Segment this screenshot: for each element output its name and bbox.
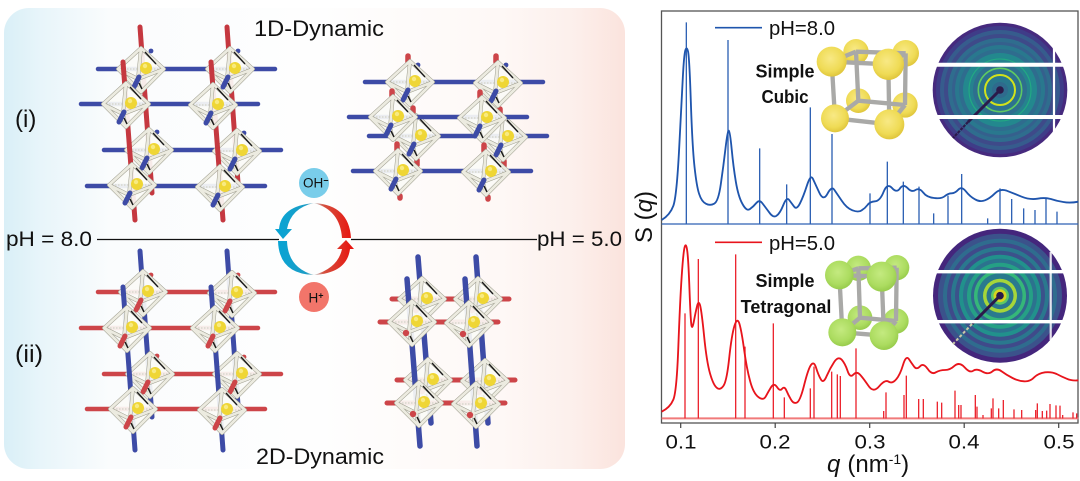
badge: OH-: OH bbox=[303, 176, 323, 190]
icon: reversible cycle arrows bbox=[275, 203, 354, 275]
x-axis title: ) bbox=[901, 451, 909, 478]
label: Simple Cubic bbox=[755, 62, 815, 107]
octahedra: back bbox=[120, 271, 260, 397]
label: Simple Tetragonal bbox=[741, 271, 831, 317]
curves: pH 8.0 bbox=[662, 22, 1078, 224]
x-axis ticks bbox=[681, 423, 1059, 428]
heading: 2D-Dynamic: 2D-Dynamic bbox=[256, 444, 384, 469]
legend: pH 5.0: pH=5.0 bbox=[769, 233, 835, 255]
blue simulated sticks bbox=[662, 22, 1078, 224]
chart frame bbox=[662, 11, 1078, 423]
diffraction pattern: pH 5.0 bbox=[930, 229, 1070, 363]
octahedra: back bbox=[387, 61, 526, 160]
rods: front row bbox=[380, 279, 505, 446]
badge: H+: + bbox=[318, 290, 324, 300]
x-axis tick labels: 0.3 bbox=[854, 432, 886, 453]
rods: back row bbox=[392, 257, 515, 423]
axis line: pH scale bbox=[97, 238, 537, 240]
badge: OH- bbox=[299, 168, 329, 198]
red broad curve bbox=[662, 245, 1078, 412]
red simulated sticks bbox=[662, 415, 1078, 421]
heading: 1D-Dynamic: 1D-Dynamic bbox=[254, 16, 384, 41]
rods: front row bbox=[349, 91, 531, 199]
legend: pH 8.0 bbox=[715, 18, 835, 40]
blue broad curve bbox=[662, 48, 1078, 220]
octahedra: front bbox=[104, 307, 245, 433]
legend: pH 5.0 bbox=[715, 233, 835, 255]
x-axis title: -1 bbox=[889, 451, 901, 467]
label: row ii: (ii) bbox=[15, 341, 43, 368]
octahedra: back bbox=[118, 48, 260, 174]
y-axis title: S (q) bbox=[631, 191, 658, 243]
curves: pH 5.0 bbox=[662, 245, 1078, 418]
rods: red vertical and blue horizontal bbox=[98, 27, 281, 193]
label: pH 5.0: pH = 5.0 bbox=[537, 228, 622, 251]
chart: structure factor S(q) bbox=[631, 11, 1078, 478]
label: Simple Tetragonal: Tetragonal bbox=[741, 297, 831, 317]
lattice: 2D-dynamic at pH 5 bbox=[380, 257, 515, 446]
label: Simple Cubic: Simple bbox=[755, 62, 815, 82]
octahedra: back bbox=[399, 278, 508, 404]
label: Simple Tetragonal: Simple bbox=[755, 271, 815, 291]
label: row i: (i) bbox=[15, 106, 36, 133]
lattice: 2D-dynamic at pH 8 bbox=[81, 251, 281, 450]
icon: simple cubic unit cell bbox=[817, 39, 919, 139]
rods: front row bbox=[81, 287, 265, 450]
octahedra: front bbox=[370, 96, 509, 195]
octahedra: front bbox=[103, 83, 243, 210]
lattice: 1D-dynamic at pH 8 bbox=[81, 27, 281, 220]
legend: pH 8.0: pH=8.0 bbox=[769, 18, 835, 40]
rods: back row bbox=[98, 251, 281, 417]
x-axis tick labels bbox=[666, 432, 1074, 453]
x-axis tick labels: 0.2 bbox=[760, 432, 790, 453]
badge: H+ bbox=[299, 282, 329, 312]
x-axis title: q (nm bbox=[827, 451, 889, 478]
rods: back row bbox=[365, 56, 547, 166]
x-axis tick labels: 0.1 bbox=[666, 432, 696, 453]
badge: H+: H bbox=[308, 290, 318, 306]
lattice: 1D-dynamic at pH 5 bbox=[349, 56, 547, 199]
label: pH 8.0: pH = 8.0 bbox=[6, 228, 92, 251]
badge: OH-: − bbox=[323, 176, 329, 186]
x-axis tick labels: 0.5 bbox=[1044, 432, 1074, 453]
x-axis tick labels: 0.4 bbox=[948, 432, 980, 453]
rods: front bbox=[81, 62, 265, 220]
octahedra: front bbox=[389, 301, 499, 427]
label: Simple Cubic: Cubic bbox=[762, 87, 808, 107]
diffraction pattern: pH 8.0 bbox=[930, 23, 1070, 157]
panel: pH-switching lattices background bbox=[4, 8, 625, 469]
icon: simple tetragonal unit cell bbox=[825, 255, 909, 350]
